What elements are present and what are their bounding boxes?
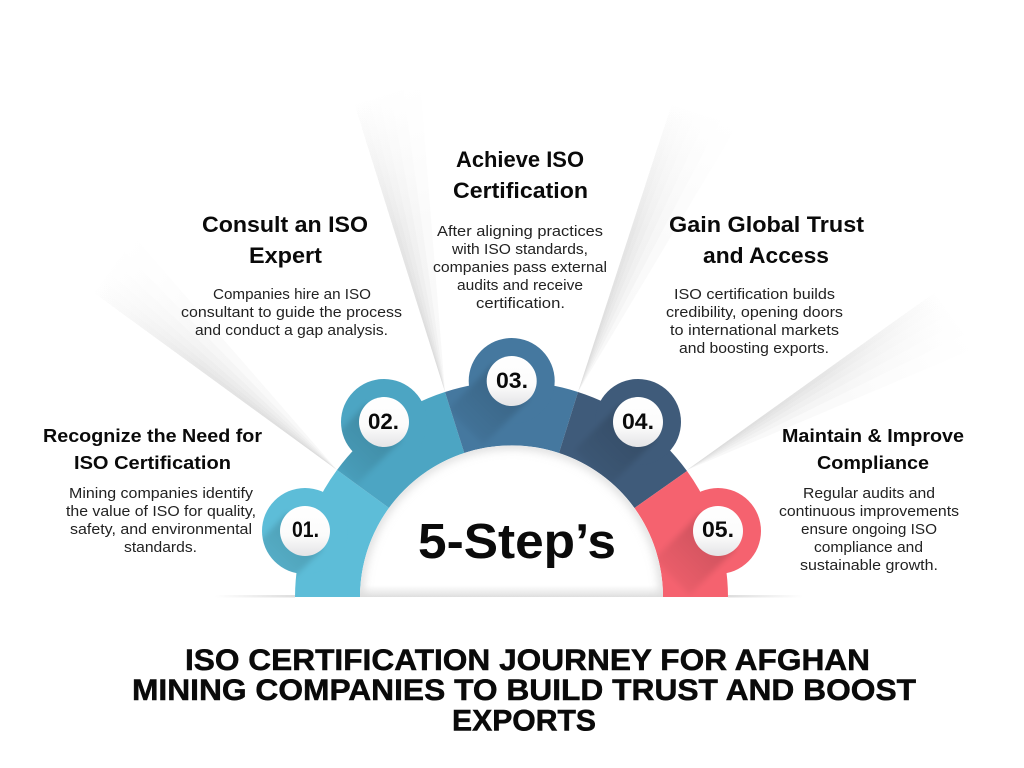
step 3 segment: [445, 338, 578, 453]
step 2 text: Consult an ISO: [202, 212, 368, 237]
step 2 text: Companies hire an ISO: [213, 286, 371, 303]
step 4 text: and Access: [703, 243, 829, 268]
main title: EXPORTS: [452, 704, 596, 738]
step 3 text: [433, 147, 607, 312]
number badge 01: [280, 506, 330, 556]
step 1 text: Recognize the Need for: [43, 425, 262, 446]
number badge 04: 04.: [622, 409, 654, 434]
number badge 02: 02.: [368, 409, 399, 434]
number badge 03: 03.: [496, 368, 528, 393]
step 4 text: and boosting exports.: [679, 340, 829, 357]
step 5 text: Compliance: [817, 452, 929, 473]
step 1 text: the value of ISO for quality,: [66, 503, 256, 520]
light ray: step 3: [578, 100, 740, 392]
step 1 text: safety, and environmental: [70, 521, 252, 538]
light ray: step 2: [353, 79, 445, 392]
step 1 text: standards.: [124, 539, 197, 556]
step 1 text: ISO Certification: [74, 452, 231, 473]
step 3 text: companies pass external: [433, 259, 607, 276]
step 3 text: certification.: [476, 295, 565, 312]
number badge 05: 05.: [702, 517, 734, 542]
step 3 text: with ISO standards,: [451, 241, 588, 258]
main title: MINING COMPANIES TO BUILD TRUST AND BOOST: [132, 674, 916, 707]
step 4 text: Gain Global Trust: [669, 212, 865, 237]
number badge 05: [693, 506, 743, 556]
step 3 text: audits and receive: [457, 277, 583, 294]
step 1 text: Mining companies identify: [69, 485, 254, 502]
step 5 text: Maintain & Improve: [782, 425, 964, 446]
center semicircle with soft inner shadow: [360, 446, 663, 597]
step 5 text: Regular audits and: [803, 485, 935, 502]
light ray: step 4: [687, 290, 979, 470]
step 1 text: [43, 425, 262, 556]
number badge 04: [613, 397, 663, 447]
step 5 text: continuous improvements: [779, 503, 959, 520]
step 2 text: Expert: [249, 243, 323, 268]
step 4 text: [666, 212, 865, 357]
base shadow line: [215, 595, 803, 598]
step 4 text: credibility, opening doors: [666, 304, 843, 321]
step 4 segment: [559, 379, 687, 508]
center heading: 5-Step’s: [418, 515, 616, 569]
step 4 text: ISO certification builds: [674, 286, 835, 303]
step 1 segment: [262, 470, 389, 597]
step 5 text: [779, 425, 964, 574]
step 3 text: After aligning practices: [437, 223, 603, 240]
main title: ISO CERTIFICATION JOURNEY FOR AFGHAN: [185, 644, 870, 677]
step 5 text: sustainable growth.: [800, 557, 938, 574]
light ray: step 1: [90, 233, 337, 470]
step 2 text: [181, 212, 402, 339]
step 5 text: compliance and: [814, 539, 923, 556]
main title: [132, 644, 916, 738]
step 3 text: Achieve ISO: [456, 147, 584, 172]
number badge 02: [359, 397, 409, 447]
number badge 03: [487, 356, 537, 406]
step 2 text: consultant to guide the process: [181, 304, 402, 321]
step 5 segment: [634, 471, 761, 597]
step 2 text: and conduct a gap analysis.: [195, 322, 388, 339]
number badge 01: 01.: [292, 517, 319, 542]
step 3 text: Certification: [453, 178, 588, 203]
step 5 text: ensure ongoing ISO: [801, 521, 937, 538]
step 2 segment: [337, 379, 464, 508]
step 4 text: to international markets: [670, 322, 839, 339]
